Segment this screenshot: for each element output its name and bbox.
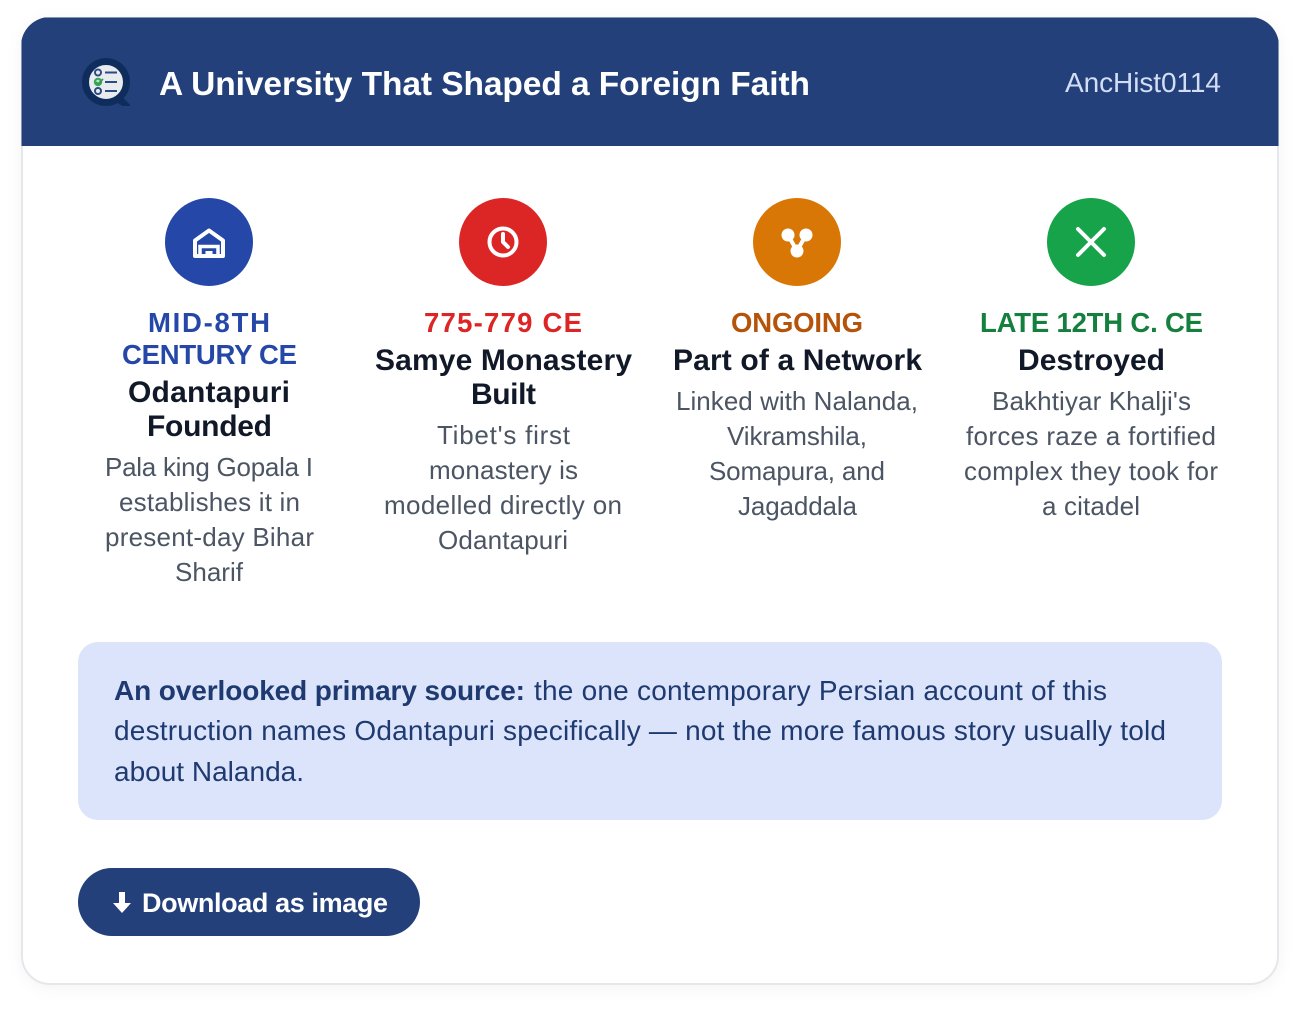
- heading: Part of a Network: [673, 344, 922, 377]
- description: forces raze a fortified: [966, 421, 1216, 451]
- date: MID-8TH: [148, 307, 270, 338]
- date: 775-779 CE: [424, 307, 582, 338]
- description: establishes it in: [119, 487, 300, 517]
- description: Tibet's first: [437, 420, 571, 450]
- description: monastery is: [429, 455, 578, 485]
- date: [122, 307, 297, 370]
- panel: Odantapuri founded: [105, 198, 314, 587]
- description: Pala king Gopala I: [105, 452, 313, 482]
- description: present-day Bihar: [105, 522, 314, 552]
- callout: [78, 642, 1222, 820]
- icon: cross: [1047, 198, 1135, 286]
- heading: Built: [471, 378, 536, 411]
- download button: [78, 868, 420, 936]
- icon: quiz logo: [86, 62, 131, 106]
- header band: [22, 18, 1278, 146]
- description: [676, 386, 918, 521]
- panel: Destroyed: [964, 198, 1218, 521]
- description: modelled directly on: [384, 490, 622, 520]
- callout: the one contemporary Persian account of this: [534, 675, 1107, 706]
- heading: Samye Monastery: [375, 344, 632, 377]
- description: [384, 420, 622, 555]
- description: [964, 386, 1218, 521]
- icon: down arrow: [113, 892, 131, 913]
- description: Jagaddala: [738, 491, 858, 521]
- description: Somapura, and: [709, 456, 885, 486]
- description: Vikramshila,: [727, 421, 867, 451]
- heading: [128, 376, 290, 443]
- icon: clock: [459, 198, 547, 286]
- heading: Founded: [147, 410, 272, 443]
- icon: house: [165, 198, 253, 286]
- callout: An overlooked primary source:: [114, 675, 525, 706]
- heading: [375, 344, 632, 411]
- date: LATE 12TH C. CE: [980, 307, 1203, 338]
- description: Linked with Nalanda,: [676, 386, 918, 416]
- panel: Part of a Network: [673, 198, 922, 521]
- download button: Download as image: [142, 888, 388, 918]
- callout: about Nalanda.: [114, 756, 304, 787]
- description: complex they took for: [964, 456, 1218, 486]
- description: a citadel: [1042, 491, 1140, 521]
- description: Sharif: [175, 557, 244, 587]
- panel: Samye Monastery: [375, 198, 632, 555]
- icon: network: [753, 198, 841, 286]
- date: CENTURY CE: [122, 339, 297, 370]
- description: Odantapuri: [438, 525, 568, 555]
- heading: Odantapuri: [128, 376, 290, 409]
- heading: Destroyed: [1018, 344, 1165, 377]
- title: A University That Shaped a Foreign Faith: [159, 66, 810, 103]
- callout: destruction names Odantapuri specifically — not the more famous story usually told: [114, 715, 1166, 746]
- code label: AncHist0114: [1065, 67, 1221, 98]
- description: Bakhtiyar Khalji's: [992, 386, 1191, 416]
- date: ONGOING: [731, 307, 863, 338]
- description: [105, 452, 314, 587]
